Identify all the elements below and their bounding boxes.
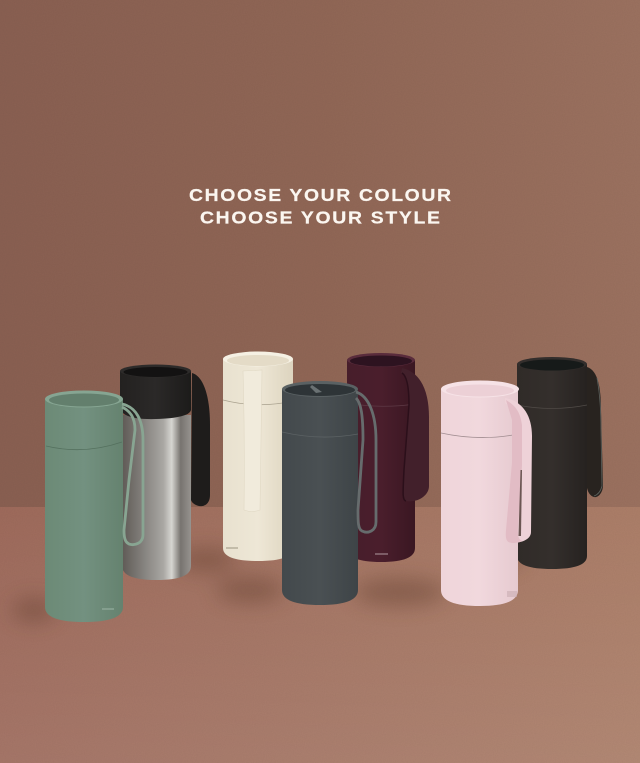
- cream strap: [243, 370, 262, 512]
- plum handle: [401, 368, 429, 501]
- logo mark: [102, 608, 114, 610]
- floor surface: [0, 507, 640, 763]
- mug: grey: [282, 381, 376, 605]
- mug: dark: [517, 357, 603, 569]
- green handle: [122, 404, 143, 545]
- dark gap between straps: [518, 470, 522, 536]
- mug: steel: [120, 364, 210, 580]
- background wall: [0, 0, 640, 508]
- mug: green: [45, 390, 143, 622]
- floor shadows: [12, 548, 524, 622]
- logo mark: [507, 591, 517, 597]
- mug: plum: [347, 353, 429, 562]
- headline: CHOOSE YOUR COLOUR: [189, 185, 451, 205]
- headline: CHOOSE YOUR STYLE: [200, 207, 440, 227]
- logo mark: [226, 547, 238, 549]
- pink handle: [505, 398, 532, 543]
- logo mark: [375, 553, 388, 555]
- headline: [189, 185, 451, 227]
- mug: cream: [223, 352, 293, 561]
- floor lighting: [0, 507, 640, 763]
- mug: pink: [441, 380, 532, 606]
- dark handle: [587, 367, 603, 497]
- grey handle: [356, 392, 376, 532]
